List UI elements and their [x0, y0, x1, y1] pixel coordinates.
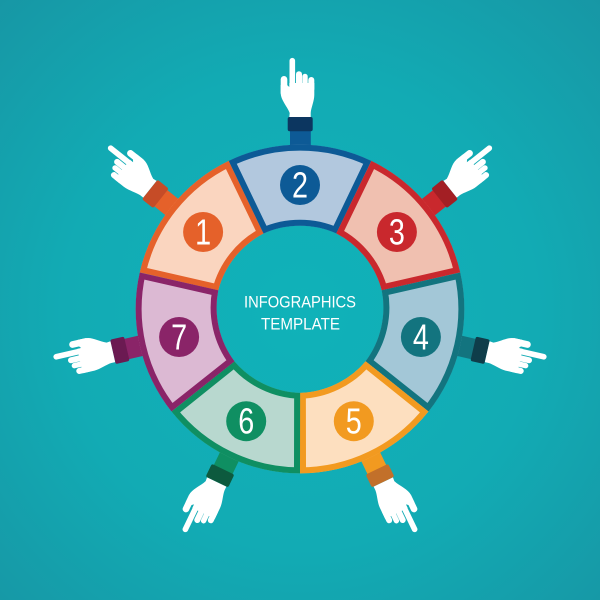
segment 4 — [366, 272, 464, 412]
hand 3 — [413, 139, 503, 220]
center title — [244, 292, 356, 334]
badge 6: 6 — [238, 401, 254, 442]
hand 6 — [175, 445, 243, 539]
badge 5: 5 — [346, 401, 362, 442]
badge 1 — [183, 212, 223, 252]
hand 1 — [97, 139, 187, 220]
segment 7 — [136, 272, 234, 412]
badge 4 — [401, 316, 441, 358]
badge 3: 3 — [389, 212, 405, 252]
badge 3 — [377, 212, 417, 252]
hand 7 — [54, 326, 147, 378]
segment 1 — [140, 160, 264, 290]
hand 2 — [281, 61, 314, 149]
hand 5 — [357, 445, 425, 539]
badge 6 — [226, 401, 266, 442]
center title: TEMPLATE — [261, 314, 340, 334]
hand 4 — [453, 326, 546, 378]
segment 5 — [300, 361, 428, 474]
badge 1: 1 — [195, 212, 211, 252]
segment 2 — [229, 145, 371, 234]
badge 7 — [159, 316, 199, 358]
center title: INFOGRAPHICS — [244, 292, 356, 312]
badge 2 — [280, 164, 320, 206]
badge 5 — [334, 401, 374, 442]
badge 2: 2 — [292, 164, 308, 206]
badge 4: 4 — [413, 316, 429, 358]
badge 7: 7 — [171, 316, 187, 358]
segment 6 — [172, 362, 300, 474]
segment 3 — [336, 160, 460, 290]
